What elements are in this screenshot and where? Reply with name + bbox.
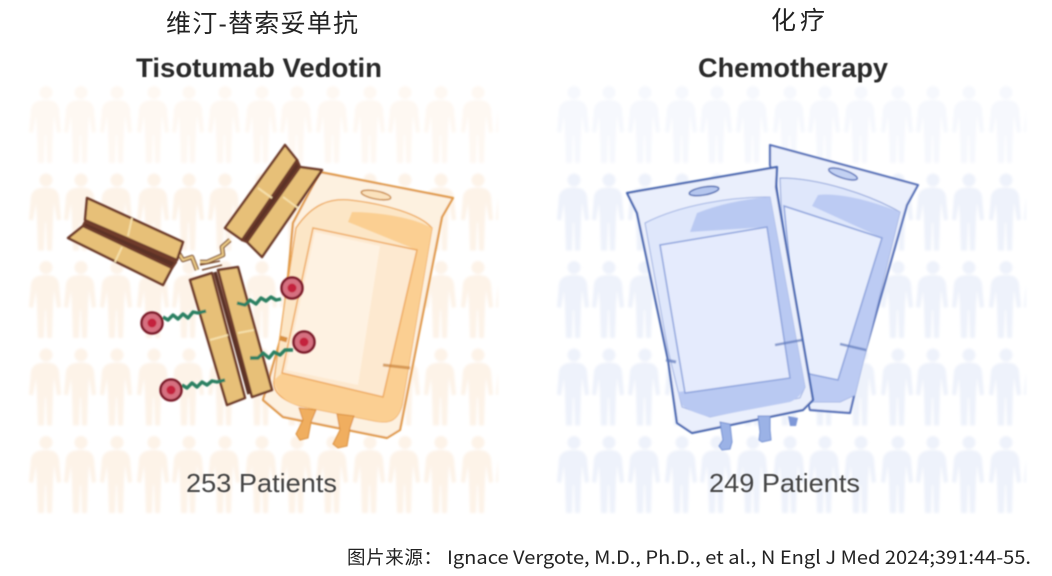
- people background: tisotumab vedotin group: [26, 83, 500, 517]
- people background: chemotherapy group: [554, 83, 1028, 517]
- illustration: back blue infusion bag: [770, 145, 918, 426]
- drug payloads: [142, 278, 314, 400]
- illustration: front blue infusion bag: [627, 167, 813, 450]
- illustration: antibody drug conjugate: [68, 145, 322, 405]
- label: tisotumab vedotin patients: 253 Patients: [186, 468, 337, 498]
- heading: tisotumab vedotin english: Tisotumab Vedotin: [136, 53, 382, 83]
- antibody right arm: [225, 145, 322, 257]
- illustration: orange infusion bag: [263, 172, 453, 448]
- antibody hinge: [178, 240, 230, 270]
- drug linkers: [163, 297, 293, 388]
- heading: chemotherapy chinese: 化疗: [771, 7, 825, 35]
- heading: tisotumab vedotin chinese: 维汀-替索妥单抗: [166, 10, 358, 38]
- source footer: Ignace Vergote, M.D., Ph.D., et al., N Engl J Med 2024;391:44-55.: [447, 544, 1031, 570]
- antibody lower body: [190, 267, 272, 405]
- heading: chemotherapy english: Chemotherapy: [698, 53, 888, 83]
- source footer: 图片来源：: [347, 544, 442, 570]
- label: chemotherapy patients: 249 Patients: [709, 468, 860, 498]
- antibody left arm: [68, 198, 183, 285]
